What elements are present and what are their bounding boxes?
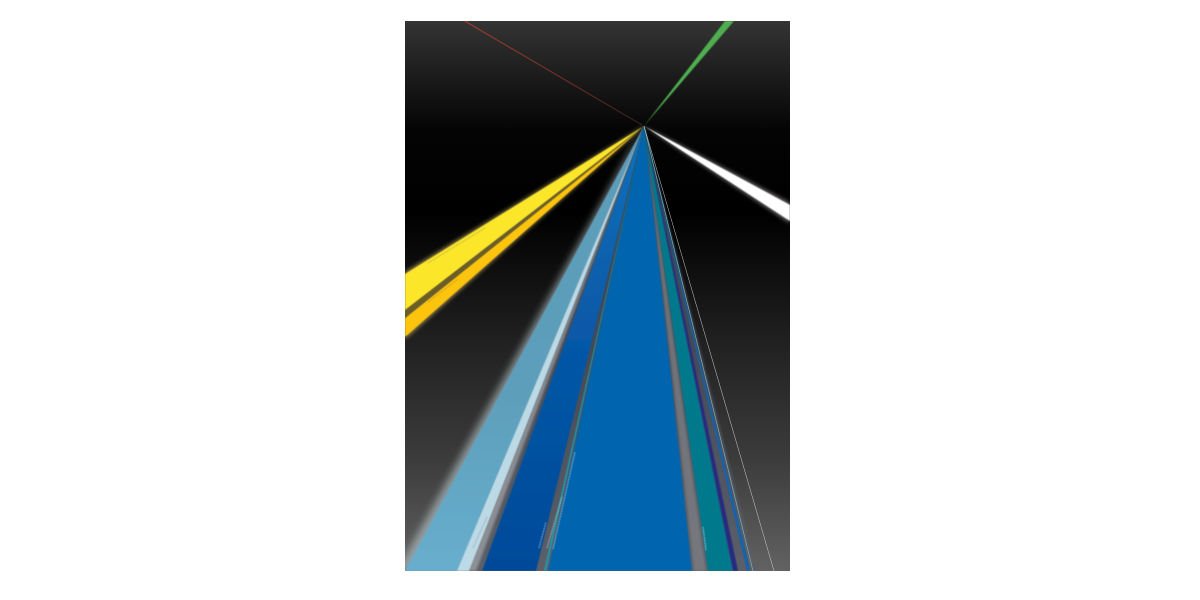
beam: bright yellow	[405, 126, 644, 311]
yellow glow	[405, 126, 644, 339]
micro label on amber beam (illegible)	[428, 279, 458, 302]
micro label on yellow beam (illegible)	[428, 228, 485, 263]
beam: light blue	[405, 126, 644, 571]
beam group: blue fan	[397, 126, 774, 571]
beam: pale line	[644, 126, 753, 571]
beam: thin red line	[463, 20, 642, 125]
beam: white hairline	[644, 126, 774, 571]
beam: main blue	[548, 126, 692, 571]
beam: amber	[405, 126, 644, 337]
beam: yellow group	[405, 126, 644, 339]
beam: green	[644, 21, 734, 126]
thin teal line	[544, 166, 635, 571]
beam: white	[644, 126, 790, 223]
beam: deep blue	[482, 126, 644, 571]
beam: teal	[644, 126, 733, 571]
light blue glow	[397, 126, 644, 571]
beam: dark olive separator	[405, 126, 644, 318]
soft pale grey beside the strip	[469, 158, 632, 571]
grey base of the fan	[462, 126, 756, 571]
beam: pale blue strip	[457, 126, 644, 571]
soft pale grey beside main blue	[647, 152, 706, 571]
micro labels on blue beams (illegible)	[465, 452, 706, 550]
poster background	[405, 21, 790, 571]
infographic canvas	[405, 21, 790, 571]
beam: navy	[644, 126, 738, 571]
beam: thin blue	[644, 126, 750, 571]
